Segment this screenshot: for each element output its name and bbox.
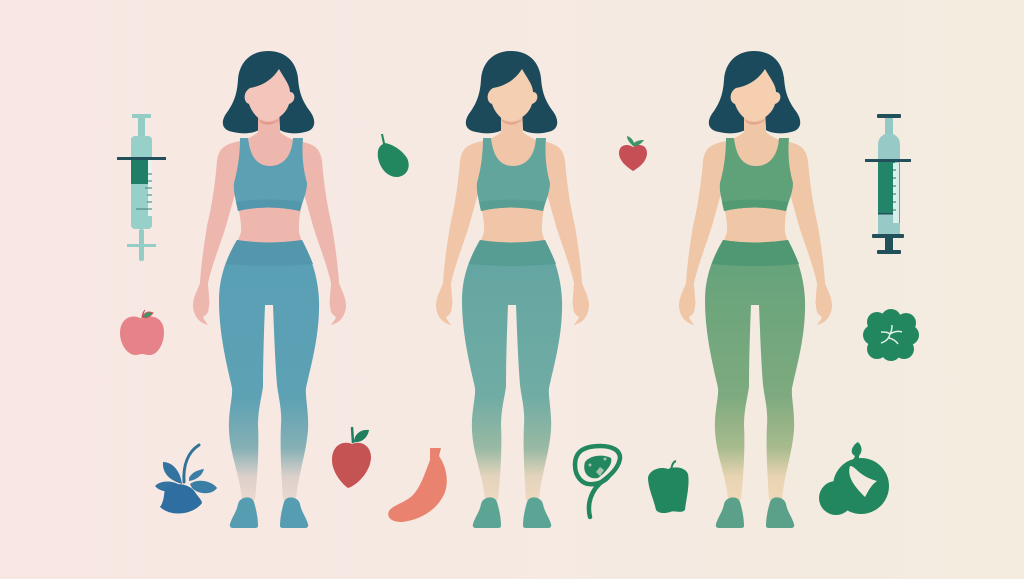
teal woman neck shadow	[501, 119, 522, 125]
teal woman face	[488, 69, 537, 121]
figure: green woman	[679, 51, 832, 528]
green woman neck shadow	[744, 119, 765, 125]
icon: green fruit blob	[819, 442, 889, 515]
figure: blue woman	[193, 51, 346, 528]
green woman face	[731, 69, 780, 121]
blue woman shoes	[230, 497, 308, 528]
green woman sports top	[720, 138, 793, 211]
icon: right syringe	[865, 114, 911, 254]
teal woman arms	[436, 141, 589, 325]
icon: green spiral organ	[575, 446, 620, 517]
green woman arms	[679, 141, 832, 325]
green woman hair	[709, 51, 800, 133]
icon: green pear	[378, 134, 409, 177]
green woman shoes	[716, 497, 794, 528]
blue woman torso	[232, 112, 307, 246]
figure: teal woman	[436, 51, 589, 528]
teal woman sports top	[477, 138, 550, 211]
teal woman hair	[466, 51, 557, 133]
icon: broccoli	[863, 309, 919, 361]
blue woman arms	[193, 141, 346, 325]
green woman leggings	[705, 240, 805, 500]
teal woman shoes	[473, 497, 551, 528]
blue woman face	[245, 69, 294, 121]
icon: green bell pepper	[648, 461, 689, 513]
blue woman leggings	[219, 240, 319, 500]
icon: red strawberry apple	[332, 427, 371, 488]
icon: salmon banana	[388, 448, 447, 522]
blue woman hair	[223, 51, 314, 133]
icon: small red apple	[619, 136, 647, 171]
teal woman torso	[475, 112, 550, 246]
green woman torso	[718, 112, 793, 246]
blue woman neck shadow	[258, 119, 279, 125]
blue woman sports top	[234, 138, 307, 211]
icon: pink apple	[120, 310, 164, 355]
icon: blue flower	[155, 445, 217, 514]
icon: left syringe	[117, 114, 166, 261]
teal woman leggings	[462, 240, 562, 500]
